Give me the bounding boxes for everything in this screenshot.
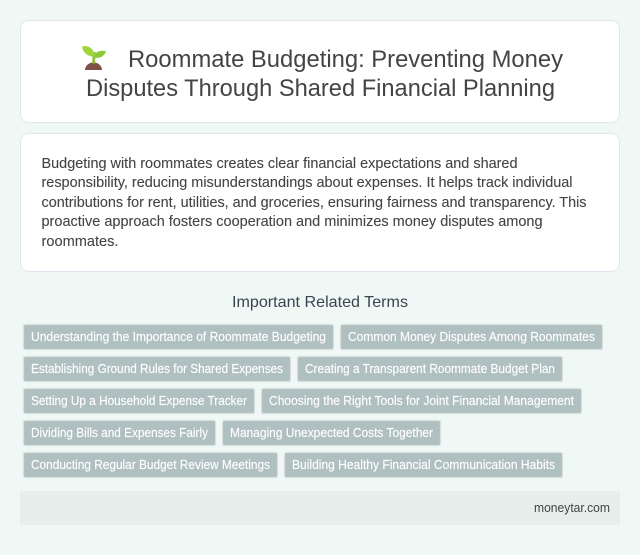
footer <box>20 491 620 525</box>
chip: dividing bills: Dividing Bills and Expenses Fairly <box>31 426 209 440</box>
chip: understanding importance <box>24 324 334 350</box>
text block: description: responsibility, reducing misunderstandings about expenses. It helps track individual <box>42 175 572 191</box>
chip: right tools <box>262 388 582 414</box>
chip: unexpected costs: Managing Unexpected Costs Together <box>230 426 433 440</box>
panel: description card <box>20 134 620 272</box>
chip: ground rules <box>24 356 290 382</box>
chip: common disputes: Common Money Disputes Among Roommates <box>348 330 595 344</box>
chip: dividing bills <box>24 420 216 446</box>
chip: ground rules: Establishing Ground Rules for Shared Expenses <box>31 362 283 376</box>
chip: expense tracker: Setting Up a Household Expense Tracker <box>31 394 247 408</box>
chip: transparent budget plan: Creating a Transparent Roommate Budget Plan <box>305 362 555 376</box>
text block: description: roommates. <box>42 234 118 250</box>
panel: related term chips <box>24 324 602 478</box>
chip: transparent budget plan <box>298 356 562 382</box>
footer: moneytar.com <box>534 501 610 515</box>
chip: common disputes <box>340 324 602 350</box>
heading: important related terms: Important Related Terms <box>232 294 408 311</box>
text block: description: Budgeting with roommates creates clear financial expectations and shared <box>42 156 518 172</box>
chip: communication habits: Building Healthy Financial Communication Habits <box>292 458 555 472</box>
title: Roommate Budgeting: Preventing Money <box>128 46 563 73</box>
chip: review meetings <box>24 452 278 478</box>
chip: understanding importance: Understanding the Importance of Roommate Budgeting <box>31 330 326 344</box>
chip: right tools: Choosing the Right Tools for Joint Financial Management <box>269 394 574 408</box>
panel: title card <box>20 20 620 122</box>
chip: expense tracker <box>24 388 254 414</box>
title <box>86 46 563 102</box>
text block: description: contributions for rent, utilities, and groceries, ensuring fairness and transparency. This <box>42 195 586 211</box>
text block: description: proactive approach fosters cooperation and minimizes money disputes among <box>42 214 542 230</box>
chip: communication habits <box>284 452 562 478</box>
text block: description <box>42 156 586 250</box>
title: Disputes Through Shared Financial Planning <box>86 75 555 102</box>
chip: unexpected costs <box>222 420 440 446</box>
chip: review meetings: Conducting Regular Budget Review Meetings <box>31 458 270 472</box>
icon: seedling <box>82 46 106 70</box>
